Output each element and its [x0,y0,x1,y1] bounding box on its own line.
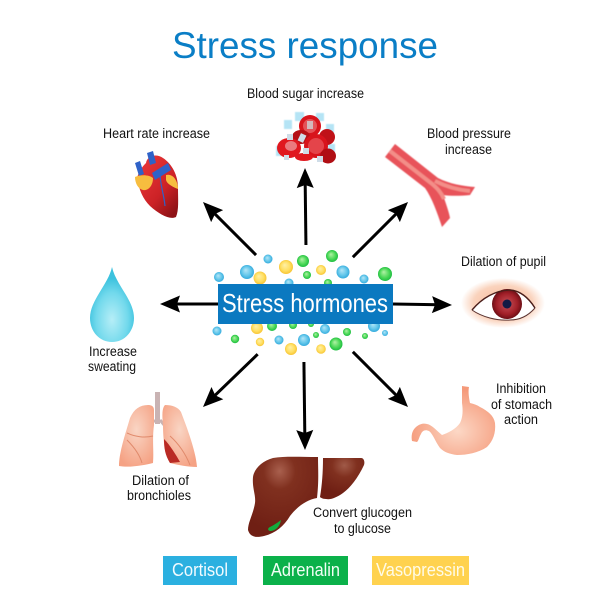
icon: heart [135,151,178,218]
bubbles: hormones below box [212,320,388,355]
label: blood pressure increase: increase [445,142,492,157]
label: inhibition of stomach action: Inhibition [496,381,546,396]
bubbles: hormones above box [214,250,392,288]
icon: liver [248,457,364,537]
arrow: to sweat drop [160,296,218,312]
label: blood sugar increase: Blood sugar increase [247,86,364,101]
legend: adrenalin [263,556,348,585]
icon: red blood cells with glucose [276,112,336,164]
title: Stress response [172,25,438,66]
icon: lungs [119,392,197,467]
arrow: to blood sugar [297,168,314,245]
legend: vasopressin: Vasopressin [376,559,465,580]
label: dilation of bronchioles: Dilation of [132,473,189,488]
arrow: to blood pressure [347,196,414,263]
icon: blood vessel [385,144,475,227]
icon: stomach [412,386,495,455]
arrow: to heart [197,196,262,261]
label: inhibition of stomach action: of stomach [491,397,552,412]
label: convert glycogen to glucose [313,505,412,536]
label: convert glycogen to glucose: to glucose [334,521,391,536]
arrow: to lungs [197,348,264,413]
label: blood pressure increase: Blood pressure [427,126,511,141]
label: dilation of bronchioles [127,473,191,503]
icon: eye [461,278,545,328]
label: increase sweating: Increase [89,344,137,359]
label: dilation of bronchioles: bronchioles [127,488,191,503]
label: inhibition of stomach action: action [504,412,538,427]
legend: cortisol [163,556,237,585]
arrow: to pupil [393,295,452,313]
label: inhibition of stomach action [491,381,552,427]
label: convert glycogen to glucose: Convert glucogen [313,505,412,520]
arrow: to stomach [347,346,414,413]
legend: vasopressin [372,556,469,585]
legend: cortisol: Cortisol [172,559,228,580]
label: dilation of pupil: Dilation of pupil [461,254,546,269]
legend: adrenalin: Adrenalin [271,559,340,580]
label: blood pressure increase [427,126,511,157]
label: heart rate increase: Heart rate increase [103,126,210,141]
label: increase sweating: sweating [88,359,136,374]
central box: stress hormones: Stress hormones [222,288,388,318]
arrow: to liver [295,362,313,450]
icon: sweat drop [90,267,134,342]
central box: stress hormones [218,284,393,324]
label: increase sweating [88,344,137,374]
